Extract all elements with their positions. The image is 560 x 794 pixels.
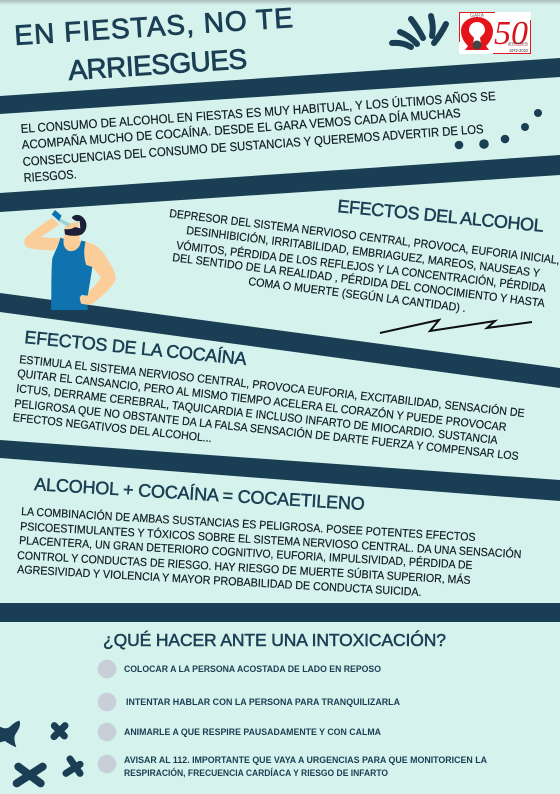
dots decoration — [455, 109, 542, 149]
text block: efectos del alcohol — [169, 208, 560, 315]
step 1: COLOCAR A LA PERSONA ACOSTADA DE LADO EN REPOSO — [124, 664, 381, 674]
logo: GARA 50 aniversario: 50 — [494, 15, 528, 52]
heading: efectos del alcohol: EFECTOS DEL ALCOHOL — [337, 196, 545, 236]
text block: cocaetileno: AGRESIVIDAD Y VIOLENCIA Y MAYOR PROBABILIDAD DE CONDUCTA SUICIDA. — [17, 564, 422, 599]
heading: qué hacer: ¿QUÉ HACER ANTE UNA INTOXICACIÓN? — [103, 629, 446, 650]
title — [13, 2, 294, 86]
logo: GARA 50 aniversario: GARA — [470, 13, 484, 19]
text block: cocaetileno: CONTROL Y CONDUCTAS DE RIESGO. HAY RIESGO DE MUERTE SÚBITA SUPERIOR, MÁS — [17, 549, 471, 587]
text block: efectos de la cocaína — [12, 353, 525, 463]
text block: introduction: ACOMPAÑA MUCHO DE COCAÍNA. DESDE EL GARA VEMOS CADA DÍA MUCHAS — [21, 105, 461, 152]
step 1 — [98, 660, 381, 678]
diagonal bands — [0, 58, 560, 622]
text block: introduction: RIESGOS. — [23, 167, 77, 185]
text block: efectos de la cocaína: EFECTOS NEGATIVOS DEL ALCOHOL... — [12, 412, 212, 445]
text block: cocaetileno: PSICOESTIMULANTES Y TÓXICOS SOBRE EL SISTEMA NERVIOSO CENTRAL. DA UNA SENSACIÓN — [20, 520, 522, 561]
text block: efectos de la cocaína: ICTUS, DERRAME CEREBRAL, TAQUICARDIA E INCLUSO INFARTO DE MIOCARDIO. SUSTANCIA — [16, 383, 498, 447]
logo: GARA 50 aniversario: aniversario — [508, 42, 528, 46]
step 4 — [98, 755, 488, 778]
text block: cocaetileno: LA COMBINACIÓN DE AMBAS SUSTANCIAS ES PELIGROSA. POSEE POTENTES EFECTOS — [21, 505, 476, 544]
heading: efectos de la cocaína: EFECTOS DE LA COCAÍNA — [24, 327, 247, 369]
text block: efectos de la cocaína: QUITAR EL CANSANCIO, PERO AL MISMO TIEMPO ACELERA EL CORAZÓN Y PUEDE PROVOCAR — [17, 367, 507, 434]
heading: alcohol + cocaína = cocaetileno: ALCOHOL + COCAÍNA = COCAETILENO — [34, 474, 365, 514]
text block: introduction: CONSECUENCIAS DEL CONSUMO DE SUSTANCIAS Y QUEREMOS ADVERTIR DE LOS — [22, 122, 484, 169]
title: ARRIESGUES — [67, 43, 248, 86]
icon: splash decoration — [392, 16, 446, 47]
text block: efectos de la cocaína: ESTIMULA EL SISTEMA NERVIOSO CENTRAL, PROVOCA EUFORIA, EXCITABILIDAD, SENSACIÓN DE — [19, 353, 525, 420]
text block: efectos de la cocaína: PELIGROSA QUE NO OBSTANTE DA LA FALSA SENSACIÓN DE DARTE FUERZA Y COMPENSAR LOS — [14, 397, 520, 463]
text block: cocaetileno — [17, 505, 522, 599]
step 2: INTENTAR HABLAR CON LA PERSONA PARA TRANQUILIZARLA — [126, 697, 401, 707]
icon: crosses decoration — [0, 721, 80, 783]
step 2 — [98, 693, 401, 711]
step 4: AVISAR AL 112. IMPORTANTE QUE VAYA A URGENCIAS PARA QUE MONITORICEN LA — [124, 755, 488, 765]
logo: GARA 50 aniversario: 1972-2022 — [509, 48, 528, 53]
logo: GARA 50 aniversario — [459, 12, 531, 54]
title: EN FIESTAS, NO TE — [13, 2, 294, 51]
step 3 — [98, 723, 382, 741]
illustration: man drinking — [24, 210, 116, 310]
step 3: ANIMARLE A QUE RESPIRE PAUSADAMENTE Y CON CALMA — [124, 727, 382, 737]
text block: efectos del alcohol: DESINHIBICIÓN, IRRITABILIDAD, EMBRIAGUEZ, MAREOS, NAUSEAS Y — [186, 224, 541, 280]
text block: introduction — [20, 88, 496, 185]
text block: introduction: EL CONSUMO DE ALCOHOL EN FIESTAS ES MUY HABITUAL, Y LOS ÚLTIMOS AÑOS SE — [20, 88, 496, 136]
step 4: RESPIRACIÓN, FRECUENCIA CARDÍACA Y RIESGO DE INFARTO — [124, 767, 388, 778]
text block: cocaetileno: PLACENTERA, UN GRAN DETERIORO COGNITIVO, EUFORIA, IMPULSIVIDAD, PÉRDIDA DE — [19, 534, 473, 572]
list: qué hacer ante una intoxicación — [98, 660, 488, 778]
icon: zigzag line — [380, 320, 532, 333]
text block: efectos del alcohol: COMA O MUERTE (SEGÚN LA CANTIDAD) . — [248, 275, 467, 315]
